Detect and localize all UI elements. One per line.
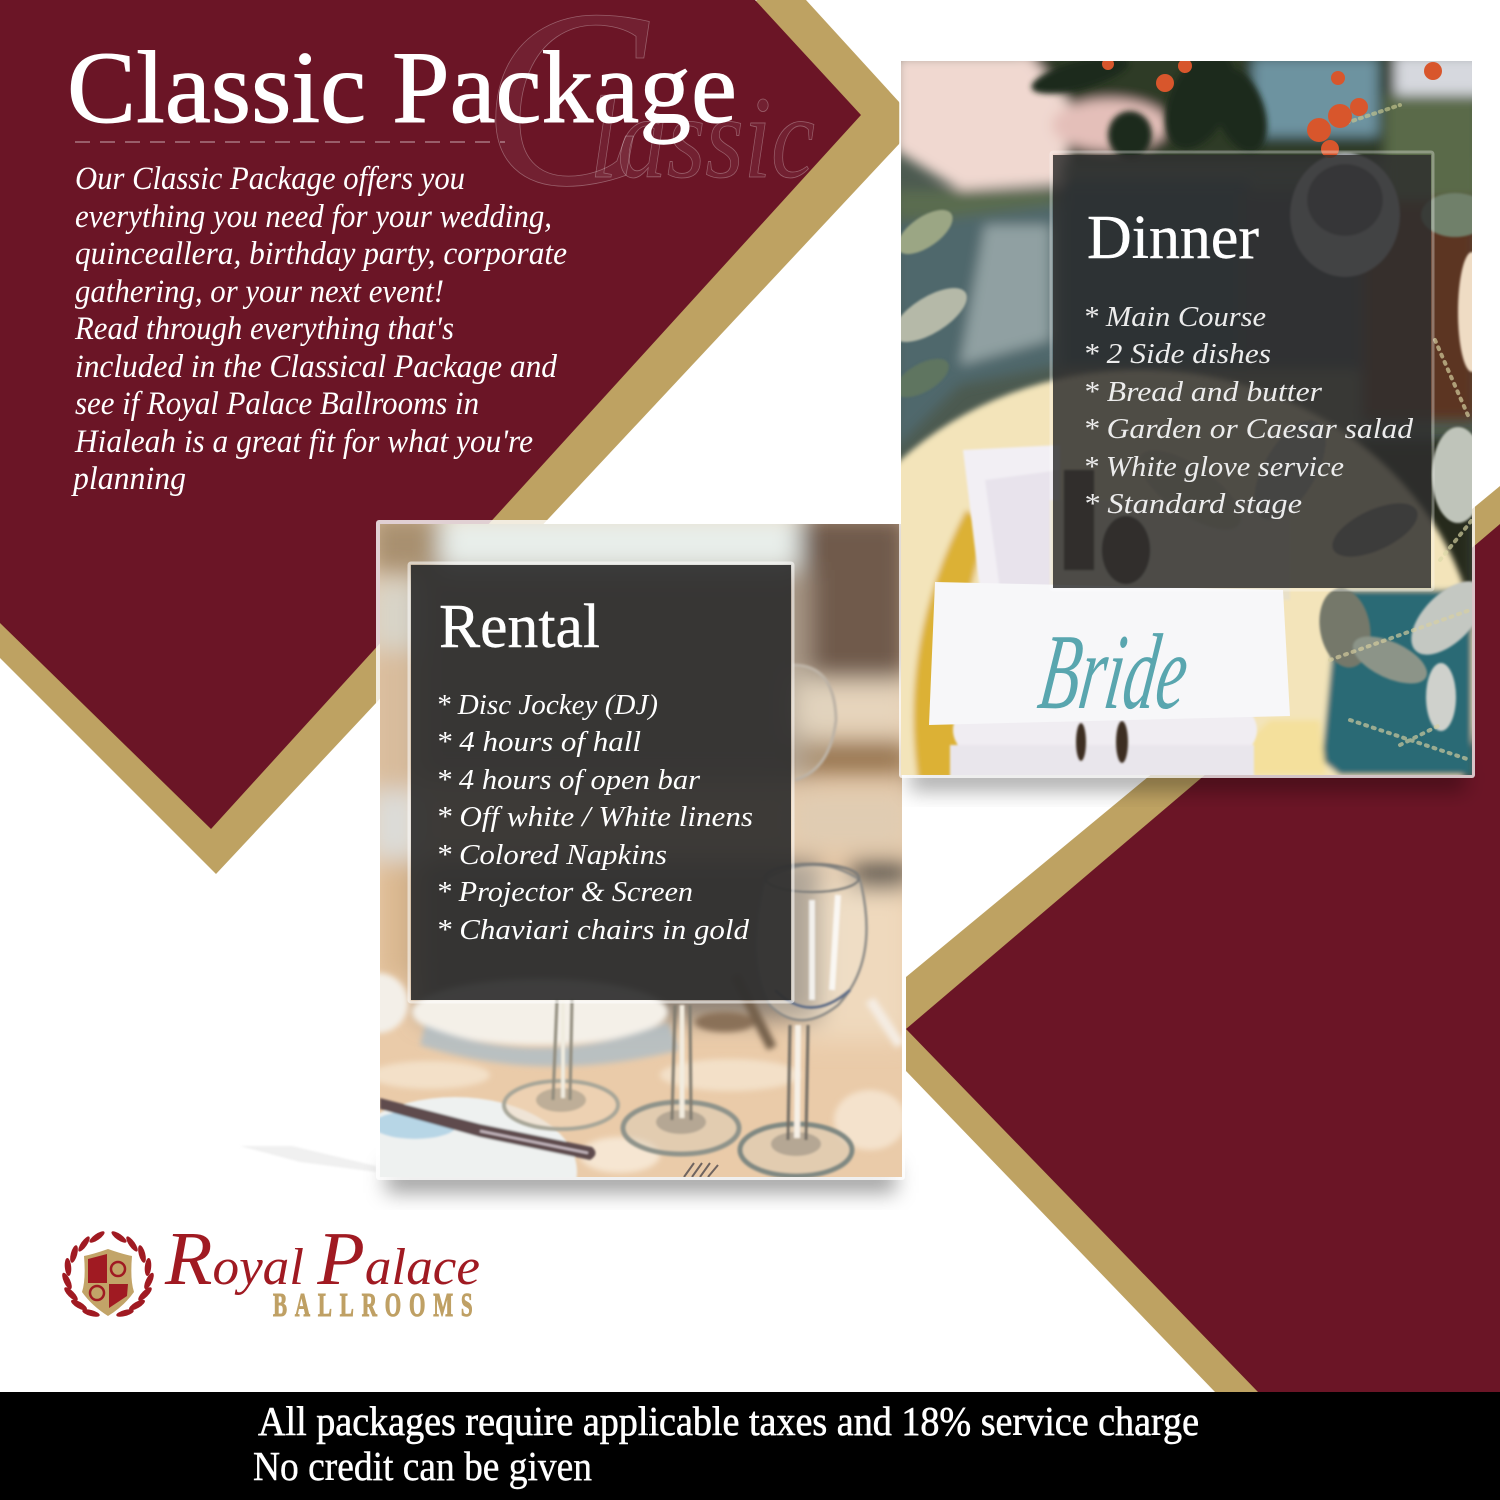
dinner list: * Main Course bbox=[1083, 302, 1266, 333]
logo wordmark script: Royal Palace bbox=[164, 1217, 480, 1301]
dinner photo: napkin and white plate bbox=[950, 445, 1290, 790]
rental list: * 4 hours of open bar bbox=[436, 765, 700, 796]
rental dark panel frame bbox=[409, 563, 793, 1002]
bottom-right gold band bbox=[906, 486, 1500, 1392]
footer note line 2: No credit can be given bbox=[253, 1443, 592, 1489]
rental dark panel bbox=[411, 565, 791, 1000]
rental list bbox=[436, 690, 753, 946]
bottom-right maroon shape bbox=[906, 524, 1500, 1392]
dinner card frame bbox=[899, 59, 1475, 778]
intro paragraph: everything you need for your wedding, bbox=[75, 199, 552, 235]
rental list: * Off white / White linens bbox=[436, 802, 753, 833]
card shadow remnant beside rental card bbox=[240, 1146, 376, 1172]
title dashed rule bbox=[75, 141, 505, 143]
logo wordmark ballrooms: BALLROOMS bbox=[273, 1287, 473, 1324]
intro paragraph: see if Royal Palace Ballrooms in bbox=[75, 386, 479, 422]
dinner list: * Bread and butter bbox=[1083, 377, 1322, 408]
card shadow: rental bbox=[386, 1165, 896, 1193]
intro paragraph: Our Classic Package offers you bbox=[75, 161, 465, 197]
dinner photo: fork and spoon handles bbox=[1064, 470, 1150, 763]
intro paragraph: gathering, or your next event! bbox=[75, 274, 444, 310]
rental photo: table setting with glasses bbox=[380, 524, 902, 1177]
rental list: * Projector & Screen bbox=[436, 877, 693, 908]
rental photo: bread plate and knife bbox=[380, 1096, 597, 1177]
rental photo: wine glasses bbox=[504, 665, 866, 1176]
footer note line 1: All packages require applicable taxes and 18% service charge bbox=[258, 1398, 1199, 1444]
dinner photo: place card bbox=[929, 582, 1290, 725]
dinner photo: dark foliage leaves bbox=[1027, 61, 1272, 157]
dinner list: * Garden or Caesar salad bbox=[1083, 414, 1414, 445]
intro paragraph: Hialeah is a great fit for what you're bbox=[74, 424, 533, 460]
dinner dark panel frame bbox=[1051, 152, 1433, 590]
dinner photo: place card name: Bride bbox=[1033, 612, 1195, 732]
intro paragraph: planning bbox=[71, 461, 186, 497]
dinner list: * Standard stage bbox=[1083, 489, 1302, 520]
dinner photo: floral table setting bbox=[901, 61, 1472, 775]
rental list: * Disc Jockey (DJ) bbox=[436, 690, 658, 721]
watermark word: Classic: lassic bbox=[590, 72, 815, 203]
dinner photo: sprig sprays bbox=[1330, 105, 1472, 760]
panel: rental card bbox=[376, 520, 905, 1180]
rental list: * Colored Napkins bbox=[436, 840, 667, 871]
intro paragraph bbox=[71, 161, 567, 497]
watermark word: Classic bbox=[482, 0, 815, 240]
intro paragraph: Read through everything that's bbox=[74, 311, 454, 347]
card shadow: dinner bbox=[910, 765, 1465, 791]
dinner photo: charger plate bbox=[901, 368, 1472, 775]
panel: dinner card bbox=[899, 61, 1475, 778]
dinner dark panel bbox=[1053, 155, 1431, 588]
rental card frame bbox=[376, 520, 905, 1180]
top-left gold chevron band bbox=[0, 0, 900, 874]
dinner list: * White glove service bbox=[1083, 452, 1344, 483]
dinner photo: red berries bbox=[1102, 58, 1442, 158]
dinner photo: leaves over table bbox=[885, 153, 1497, 731]
icon: laurel wreath bbox=[60, 1229, 156, 1318]
rental list: * Chaviari chairs in gold bbox=[436, 915, 750, 946]
rental heading: Rental bbox=[439, 593, 600, 661]
icon: crest shield bbox=[82, 1249, 134, 1316]
logo: Royal Palace Ballrooms bbox=[60, 1217, 480, 1324]
intro paragraph: included in the Classical Package and bbox=[75, 349, 557, 385]
title: Classic Package bbox=[67, 31, 737, 145]
rental list: * 4 hours of hall bbox=[436, 727, 641, 758]
top-left maroon banner bbox=[0, 0, 861, 829]
footer bar bbox=[0, 1392, 1500, 1500]
dinner list: * 2 Side dishes bbox=[1083, 339, 1271, 370]
dinner heading: Dinner bbox=[1087, 204, 1259, 272]
dinner list bbox=[1083, 302, 1414, 520]
intro paragraph: quinceallera, birthday party, corporate bbox=[75, 236, 567, 272]
rental photo: fork tines bbox=[684, 1163, 718, 1177]
